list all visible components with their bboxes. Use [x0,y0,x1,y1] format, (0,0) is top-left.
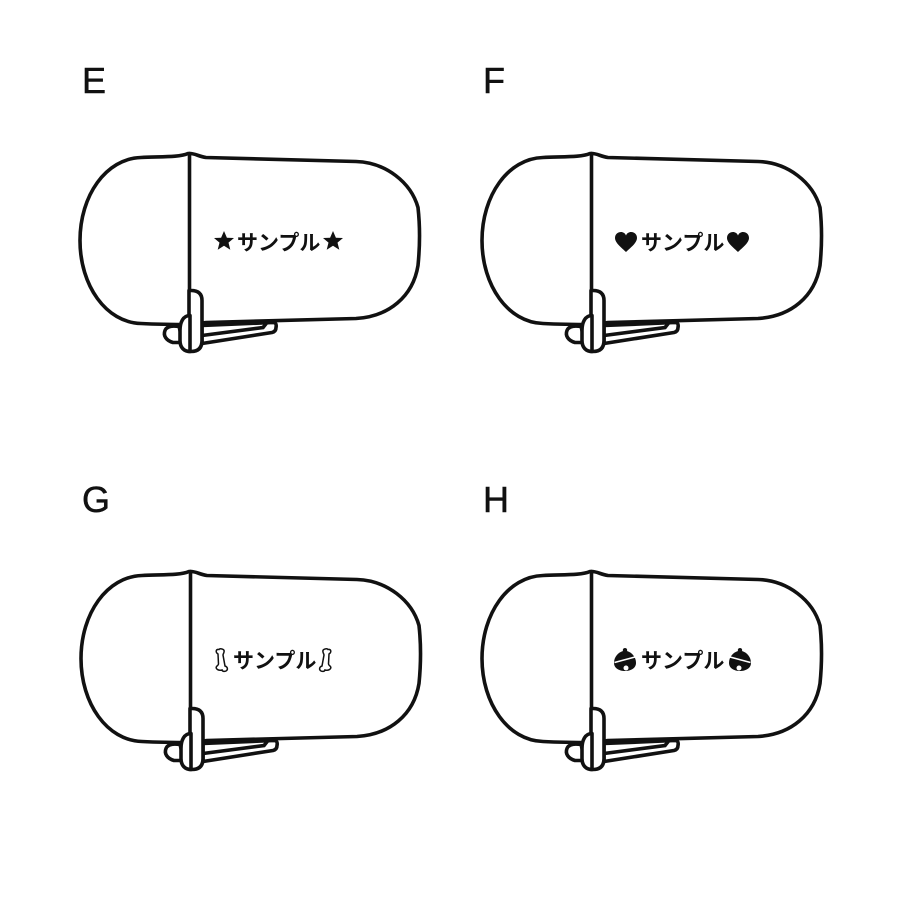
panel: variant G [81,479,420,770]
illustration: case F [482,154,822,352]
illustration: case H [482,572,822,770]
name sample with bones: サンプル [233,650,316,673]
panel: variant E [80,60,420,352]
heading: G: G [82,479,110,520]
name sample with bones [216,649,331,673]
heading: E: E [82,60,106,101]
panel: variant H [482,479,822,770]
name sample with stars: サンプル [237,232,320,255]
panel: variant F [482,60,822,352]
name sample with bells: サンプル [641,650,724,673]
name sample with hearts: サンプル [641,232,724,255]
name sample with hearts [615,232,749,255]
name sample with stars [214,231,343,255]
illustration: case E [80,154,420,352]
heading: F: F [483,60,505,101]
illustration: case G [81,572,420,770]
name sample with bells [614,648,751,673]
heading: H: H [483,479,509,520]
